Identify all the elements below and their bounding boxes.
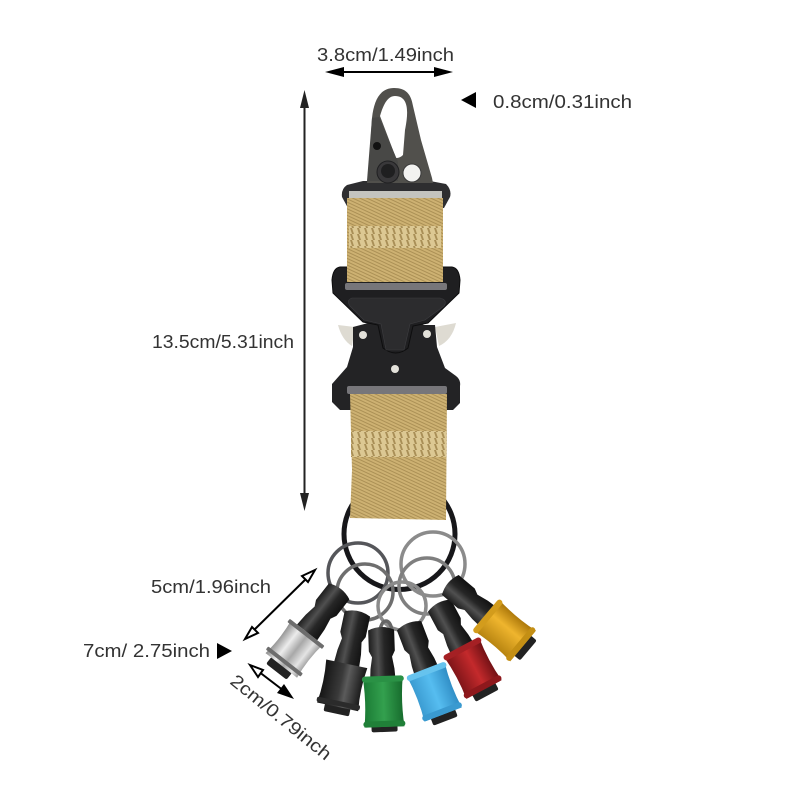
white side wings	[338, 323, 456, 346]
adapter length arrow	[245, 570, 315, 639]
socket adapter: blue	[388, 615, 465, 729]
adapter length label: 5cm/1.96inch	[151, 577, 271, 597]
height label: 13.5cm/5.31inch	[152, 332, 294, 352]
adapter diameter label: 2cm/0.79inch	[226, 671, 335, 764]
split key rings	[328, 532, 465, 645]
buckle male half	[332, 322, 460, 410]
marker triangle: spread	[217, 643, 232, 659]
carabiner hook	[367, 88, 433, 183]
width arrow	[325, 67, 453, 77]
overall spread label: 7cm/ 2.75inch	[83, 641, 210, 661]
marker triangle: hook gap	[461, 92, 476, 108]
large metal ring	[344, 478, 455, 590]
upper webbing strap	[347, 198, 443, 282]
socket adapter: black	[315, 606, 380, 718]
socket adapter: red	[419, 593, 506, 706]
buckle female half	[332, 267, 460, 353]
height arrow	[300, 90, 309, 511]
width label: 3.8cm/1.49inch	[317, 45, 454, 65]
hook gap label: 0.8cm/0.31inch	[493, 92, 632, 112]
socket adapter: gold	[435, 567, 542, 667]
lower webbing strap	[350, 394, 447, 520]
top webbing plate	[342, 181, 450, 208]
adapter diameter arrow	[250, 665, 294, 699]
socket adapter: silver	[259, 575, 358, 685]
socket adapter: green	[360, 626, 406, 733]
